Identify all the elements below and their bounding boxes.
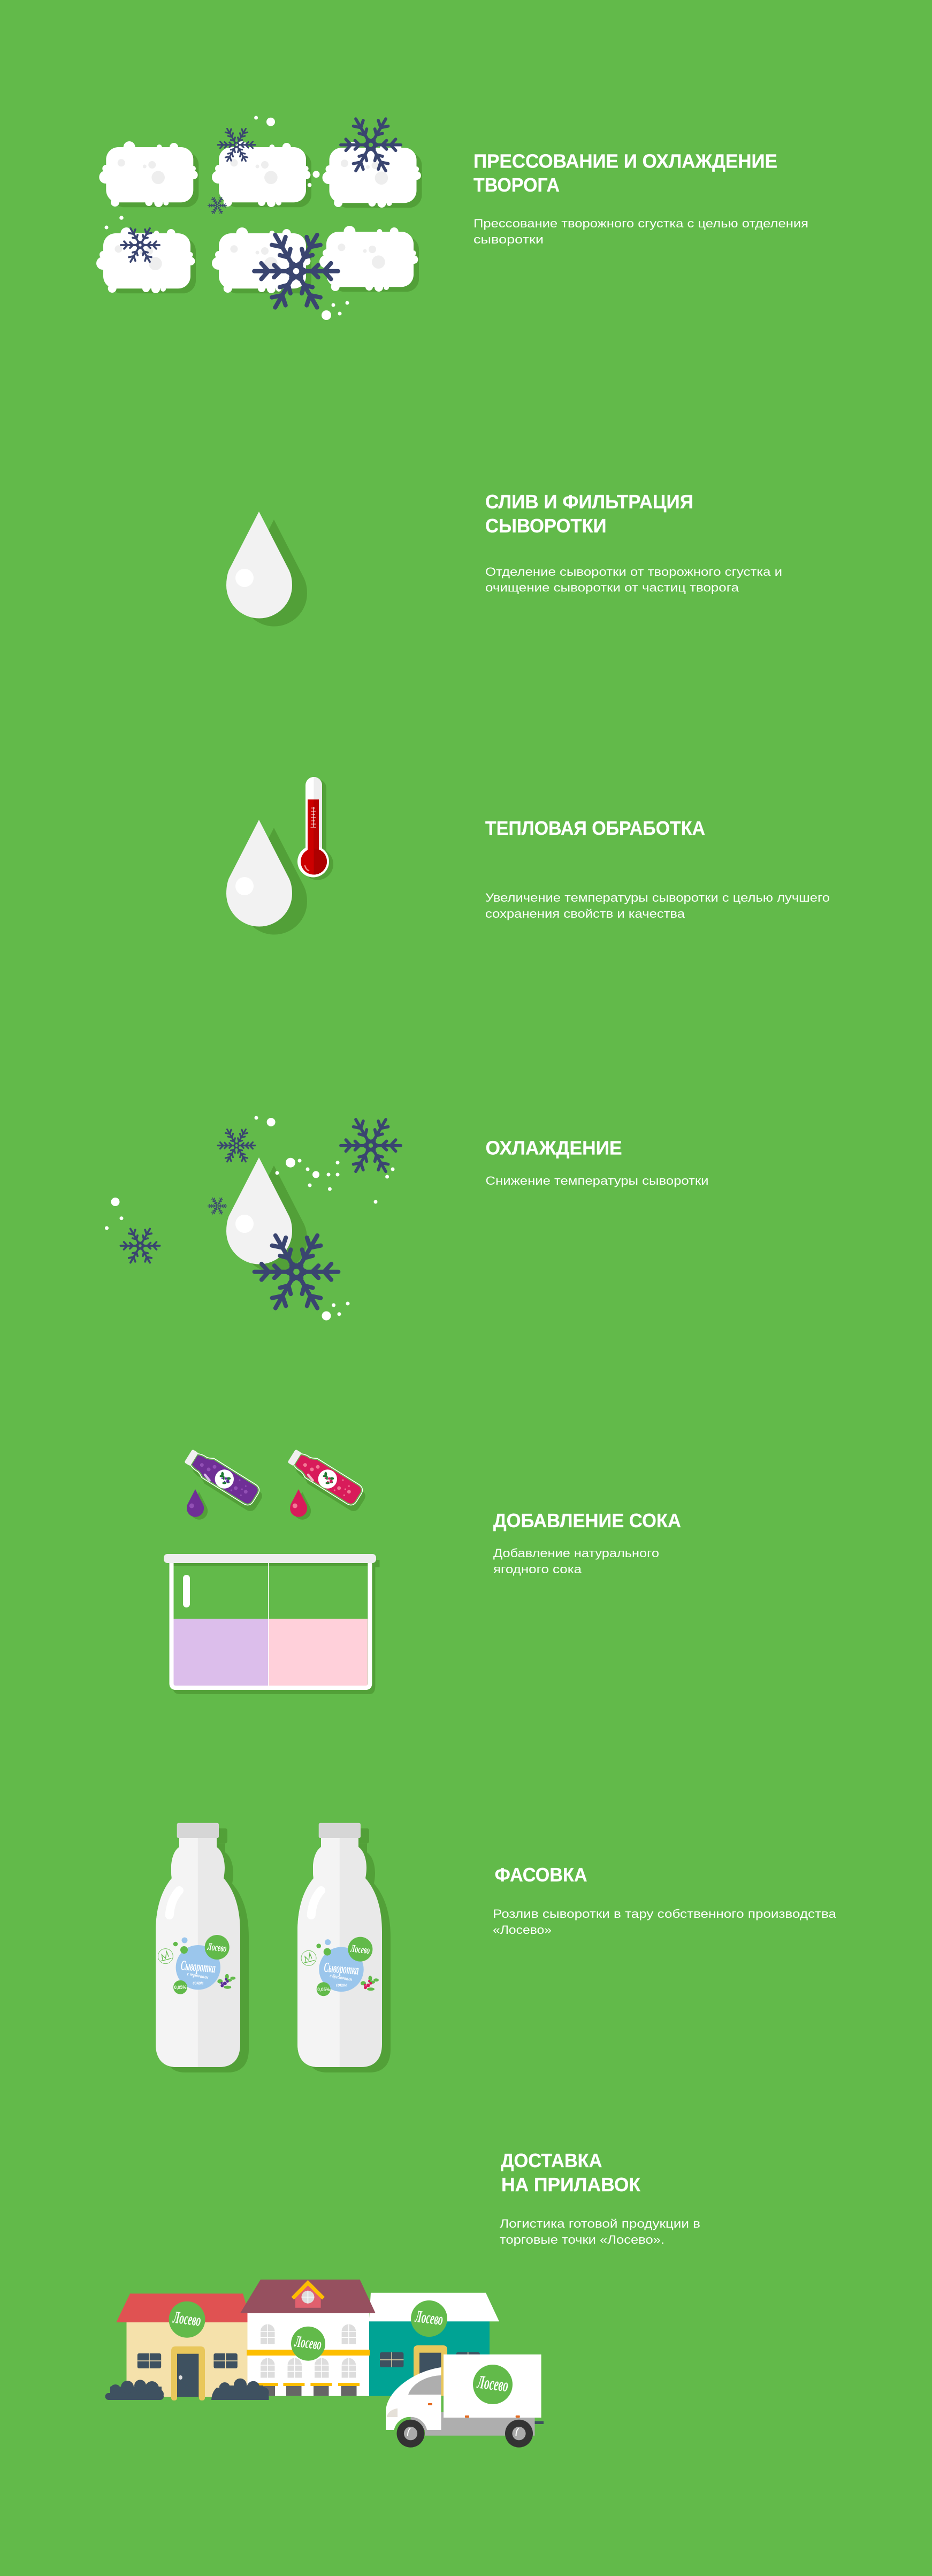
text: step 6 description xyxy=(493,1907,837,1937)
heading: step 1 xyxy=(473,150,777,196)
icon: blueberry juice bottle xyxy=(184,1449,263,1512)
heading: step 1: ТВОРОГА xyxy=(473,174,560,196)
text: step 1 description: сыворотки xyxy=(473,233,544,246)
illustration: white shop xyxy=(240,2280,376,2396)
bottle label: lingonberry: с брусничным xyxy=(330,1973,353,1983)
icon: lingonberry juice bottle xyxy=(287,1449,366,1512)
icon: blueberry juice drop xyxy=(187,1489,208,1520)
bottle label: blueberry xyxy=(158,1935,235,1994)
text: step 4 description: Снижение температуры сыворотки xyxy=(486,1174,708,1187)
heading: step 4: ОХЛАЖДЕНИЕ xyxy=(486,1137,622,1159)
illustration: blueberry whey bottle xyxy=(156,1823,249,2072)
panel: step 5 adding juice xyxy=(164,1449,681,1694)
illustration: cream shop: Лосево xyxy=(172,2307,202,2330)
icon: lingonberry juice drop xyxy=(290,1489,311,1520)
text: step 2 description xyxy=(485,565,782,595)
panel: step 1 pressing and cooling xyxy=(96,116,808,320)
heading: step 7: ДОСТАВКА xyxy=(501,2150,602,2171)
text: step 2 description: Отделение сыворотки от творожного сгустка и xyxy=(485,565,782,578)
illustration: mixing vat xyxy=(164,1554,380,1694)
panel: step 6 packaging xyxy=(156,1823,837,2072)
text: step 5 description: ягодного сока xyxy=(493,1563,582,1576)
text: step 5 description: Добавление натурального xyxy=(493,1546,659,1560)
heading: step 3: ТЕПЛОВАЯ ОБРАБОТКА xyxy=(485,817,705,839)
illustration: right bush xyxy=(211,2379,269,2400)
heading: step 6: ФАСОВКА xyxy=(495,1864,587,1886)
illustration: delivery truck xyxy=(386,2354,544,2448)
panel: step 7 delivery xyxy=(105,2150,700,2448)
text: step 7 description xyxy=(500,2217,700,2246)
text: step 3 description: сохранения свойств и качества xyxy=(485,907,685,920)
illustration: teal shop: Лосево xyxy=(414,2306,444,2329)
illustration: cream shop xyxy=(116,2293,247,2400)
illustration: teal shop xyxy=(369,2293,499,2396)
text: step 6 description: Розлив сыворотки в тару собственного производства xyxy=(493,1907,837,1920)
text: step 1 description: Прессование творожного сгустка с целью отделения xyxy=(473,217,808,230)
illustration: lingonberry whey bottle xyxy=(297,1823,391,2072)
text: step 6 description: «Лосево» xyxy=(493,1923,552,1937)
bottle label: blueberry: соком xyxy=(193,1980,203,1986)
heading: step 2 xyxy=(485,491,693,537)
icon: thermometer xyxy=(297,777,333,880)
bottle label: lingonberry xyxy=(301,1937,379,1996)
heading: step 7: НА ПРИЛАВОК xyxy=(501,2174,641,2196)
icon: whey drop xyxy=(226,820,307,934)
heading: step 2: СЛИВ И ФИЛЬТРАЦИЯ xyxy=(485,491,693,513)
panel: step 3 heat treatment xyxy=(226,777,830,934)
text: step 7 description: торговые точки «Лосево». xyxy=(500,2233,664,2246)
illustration: white shop: Лосево xyxy=(293,2333,323,2353)
text: step 5 description xyxy=(493,1546,659,1576)
text: step 7 description: Логистика готовой продукции в xyxy=(500,2217,700,2230)
panel: step 2 draining and filtering xyxy=(226,491,782,626)
bottle label: lingonberry: соком xyxy=(336,1982,347,1988)
text: step 3 description: Увеличение температуры сыворотки с целью лучшего xyxy=(485,891,830,904)
text: step 1 description xyxy=(473,217,808,246)
heading: step 1: ПРЕССОВАНИЕ И ОХЛАЖДЕНИЕ xyxy=(473,150,777,172)
panel: step 4 cooling xyxy=(105,1116,708,1321)
heading: step 5: ДОБАВЛЕНИЕ СОКА xyxy=(493,1510,681,1531)
illustration: curd blocks with snowflakes xyxy=(96,116,422,320)
illustration: delivery truck: Лосево xyxy=(476,2371,509,2396)
bottle label: blueberry: с черничным xyxy=(187,1971,209,1980)
illustration: left bush xyxy=(105,2380,164,2400)
icon: whey drop xyxy=(226,512,307,626)
heading: step 7 xyxy=(501,2150,641,2196)
illustration: drop with snowflakes xyxy=(105,1116,401,1321)
text: step 3 description xyxy=(485,891,830,920)
heading: step 2: СЫВОРОТКИ xyxy=(485,515,607,537)
text: step 2 description: очищение сыворотки от частиц творога xyxy=(485,581,739,595)
